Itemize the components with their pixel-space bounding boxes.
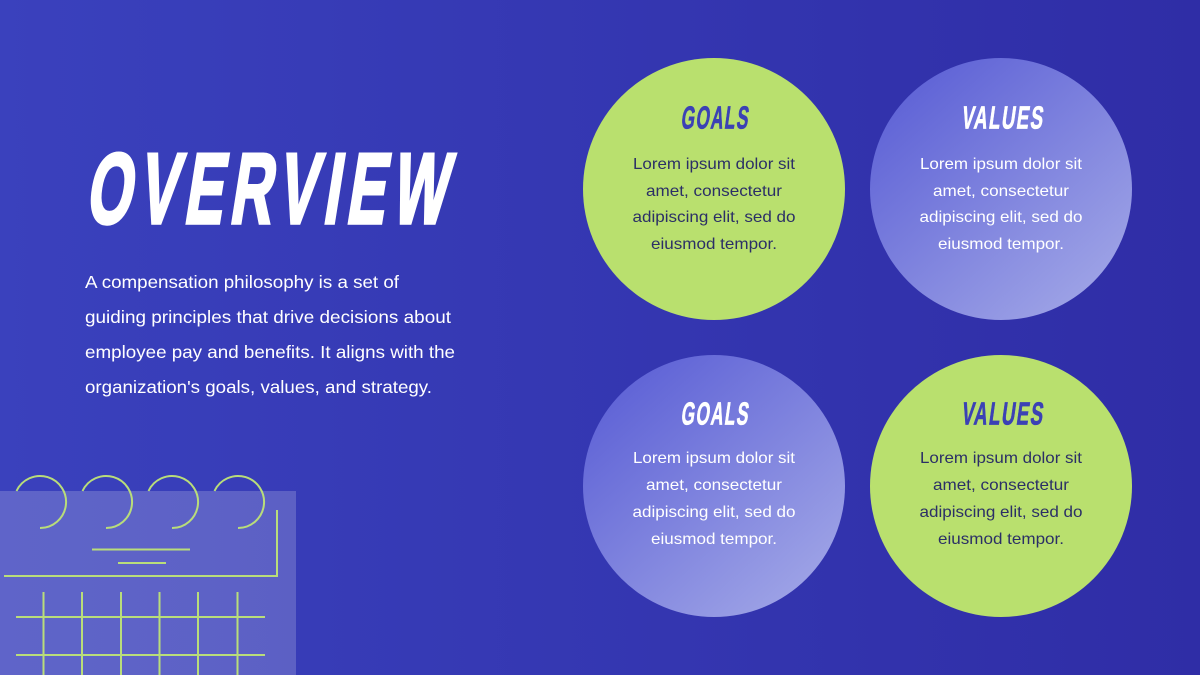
text block: goals body: eiusmod tempor. [651, 236, 777, 253]
text block: values body [920, 156, 1083, 253]
text block: description: employee pay and benefits. It aligns with the [85, 342, 455, 362]
panel: goals (bottom left) [583, 355, 845, 617]
panel: values (bottom right) [870, 355, 1132, 617]
text block: values body: eiusmod tempor. [938, 531, 1064, 548]
heading: goals: GOALS [679, 397, 752, 432]
text block: description [85, 272, 455, 397]
text block: values body: Lorem ipsum dolor sit [920, 156, 1083, 173]
text block: goals body: amet, consectetur [646, 183, 783, 200]
panel: values (top right) [870, 58, 1132, 320]
text block: goals body: Lorem ipsum dolor sit [633, 156, 796, 173]
text block: values body [920, 450, 1083, 548]
text block: values body: adipiscing elit, sed do [920, 504, 1083, 521]
text block: goals body [632, 450, 796, 548]
icon: calendar decoration [0, 476, 296, 675]
text block: values body: amet, consectetur [933, 477, 1070, 494]
text block: goals body: Lorem ipsum dolor sit [633, 450, 796, 467]
text block: goals body: amet, consectetur [646, 477, 783, 494]
text block: values body: Lorem ipsum dolor sit [920, 450, 1083, 467]
text block: values body: adipiscing elit, sed do [920, 209, 1083, 226]
text block: description: guiding principles that drive decisions about [85, 307, 451, 327]
heading: goals: GOALS [679, 101, 752, 136]
heading: values: VALUES [960, 395, 1047, 432]
text block: goals body: eiusmod tempor. [651, 531, 777, 548]
text block: goals body: adipiscing elit, sed do [632, 209, 796, 226]
text block: values body: amet, consectetur [933, 183, 1070, 200]
text block: goals body [632, 156, 796, 253]
heading: values: VALUES [960, 99, 1047, 136]
text block: description: organization's goals, values, and strategy. [85, 377, 432, 397]
panel: goals (top left) [583, 58, 845, 320]
text block: values body: eiusmod tempor. [938, 236, 1064, 253]
text block: description: A compensation philosophy is a set of [85, 272, 399, 292]
title: OVERVIEW [82, 133, 466, 245]
text block: goals body: adipiscing elit, sed do [632, 504, 796, 521]
